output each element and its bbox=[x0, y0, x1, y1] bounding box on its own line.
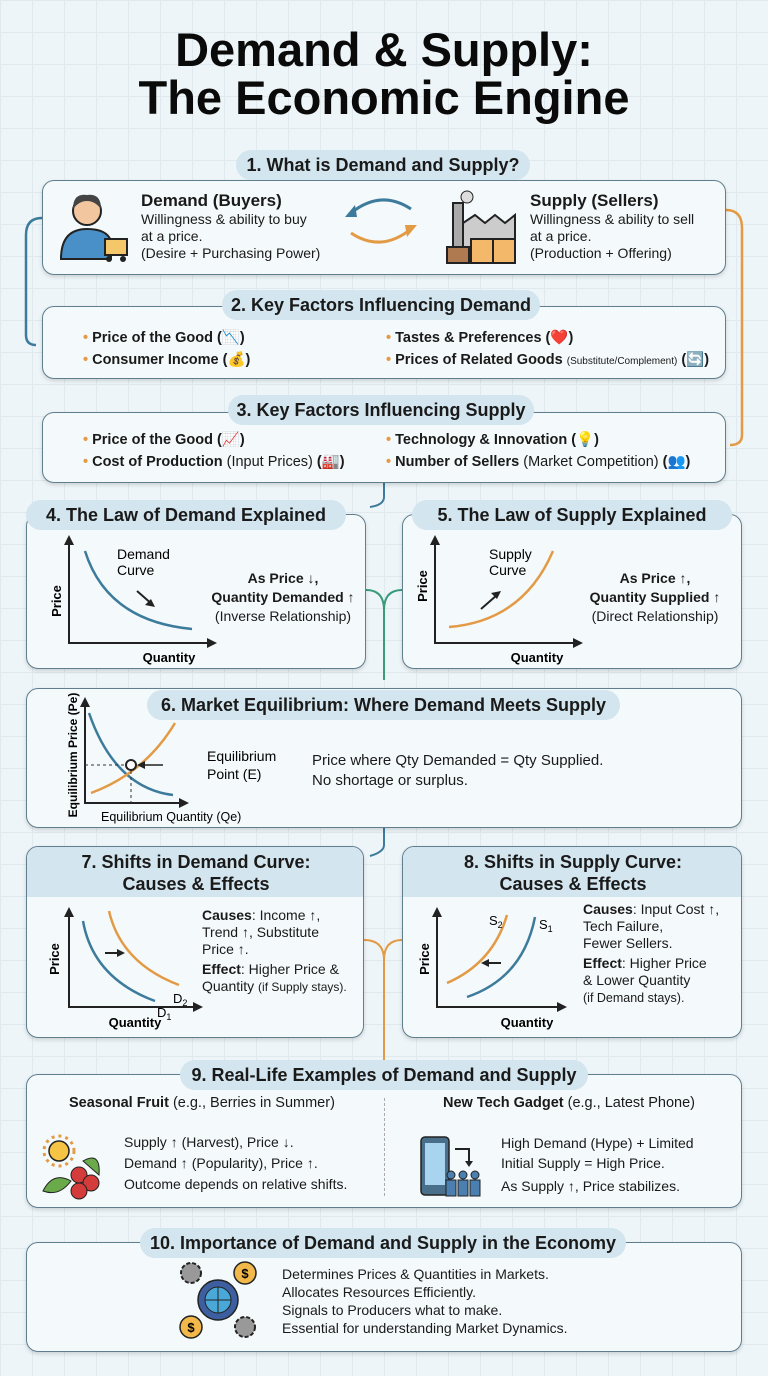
panel: demand factors: • Price of the Good (📉) bbox=[83, 330, 245, 346]
heading: 5 bbox=[412, 500, 732, 530]
text: Tech Failure, bbox=[583, 918, 663, 934]
icon: globe with gears and coins: $ bbox=[187, 1320, 195, 1335]
panel: market equilibrium bbox=[26, 688, 742, 828]
panel: demand factors: • Tastes & Preferences (❤️) bbox=[386, 330, 573, 346]
icon: phone and people bbox=[420, 1136, 480, 1196]
chart: demand shift: Quantity bbox=[109, 1015, 162, 1030]
text bbox=[590, 570, 720, 624]
panel: importance bbox=[26, 1242, 742, 1352]
arrows: exchange bbox=[345, 198, 417, 244]
text: Price where Qty Demanded = Qty Supplied. bbox=[312, 752, 603, 769]
text: Trend ↑, Substitute bbox=[202, 924, 319, 940]
text: fruit details bbox=[124, 1134, 347, 1192]
heading: 10 bbox=[140, 1228, 626, 1258]
text: Price ↑. bbox=[202, 941, 249, 957]
text: No shortage or surplus. bbox=[312, 772, 468, 789]
title bbox=[139, 23, 629, 124]
text: fruit details: Outcome depends on relative shifts. bbox=[124, 1176, 347, 1192]
text: fruit details: Supply ↑ (Harvest), Price ↓. bbox=[124, 1134, 294, 1150]
heading: 5: 5. The Law of Supply Explained bbox=[437, 505, 707, 525]
heading: 4: 4. The Law of Demand Explained bbox=[46, 505, 326, 525]
text: demand: (Desire + Purchasing Power) bbox=[141, 245, 320, 261]
heading: 1 bbox=[236, 150, 530, 180]
heading: 6 bbox=[147, 690, 620, 720]
text: importance list: Allocates Resources Efficiently. bbox=[282, 1284, 476, 1300]
text: Fewer Sellers. bbox=[583, 935, 672, 951]
text: tech gadget title: New Tech Gadget (e.g., Latest Phone) bbox=[443, 1095, 695, 1111]
chart: supply shift: S bbox=[489, 913, 498, 928]
chart: demand curve: Curve bbox=[117, 562, 155, 578]
chart: supply shift bbox=[417, 907, 567, 1030]
chart: supply shift: Price bbox=[417, 943, 432, 975]
text: importance list: Determines Prices & Quantities in Markets. bbox=[282, 1266, 549, 1282]
text: Effect: Higher Price bbox=[583, 955, 707, 971]
panel: shifts in supply bbox=[402, 846, 742, 1038]
text bbox=[202, 907, 347, 994]
chart: supply curve: Quantity bbox=[511, 650, 564, 665]
panel: shifts in demand bbox=[26, 846, 364, 1038]
text: (if Demand stays). bbox=[583, 991, 684, 1005]
chart: equilibrium bbox=[66, 693, 276, 824]
chart: supply shift: S bbox=[539, 917, 548, 932]
chart: demand curve bbox=[49, 535, 217, 665]
panel: demand factors: • Consumer Income (💰) bbox=[83, 352, 250, 368]
text: demand bbox=[141, 191, 320, 261]
chart: demand shift: Price bbox=[47, 943, 62, 975]
panel: demand factors bbox=[42, 306, 726, 379]
text: Quantity Supplied ↑ bbox=[590, 589, 720, 605]
text: supply: Supply (Sellers) bbox=[530, 191, 658, 210]
chart: supply shift: 1 bbox=[548, 924, 553, 934]
panel: supply factors: • Number of Sellers (Market Competition) (👥) bbox=[386, 454, 690, 470]
chart: demand shift: 1 bbox=[166, 1012, 171, 1022]
chart: demand curve: Demand bbox=[117, 546, 170, 562]
chart: supply curve bbox=[415, 535, 583, 665]
heading: 2: 2. Key Factors Influencing Demand bbox=[231, 295, 531, 315]
icon: globe with gears and coins bbox=[179, 1261, 257, 1339]
heading: 3: 3. Key Factors Influencing Supply bbox=[236, 400, 526, 420]
chart: equilibrium: Equilibrium Price (Pe) bbox=[66, 693, 80, 817]
chart: supply curve: Price bbox=[415, 570, 430, 602]
chart: demand shift bbox=[47, 907, 203, 1030]
chart: demand shift: D bbox=[157, 1005, 166, 1020]
title: Demand & Supply: bbox=[175, 23, 593, 76]
panel: supply factors: • Cost of Production (Input Prices) (🏭) bbox=[83, 454, 345, 470]
text: (Direct Relationship) bbox=[592, 608, 718, 624]
text: gadget details bbox=[501, 1135, 694, 1194]
text: demand: at a price. bbox=[141, 228, 202, 244]
text: importance list: Essential for understanding Market Dynamics. bbox=[282, 1320, 568, 1336]
chart: demand shift: D bbox=[173, 991, 182, 1006]
text: demand: Willingness & ability to buy bbox=[141, 211, 307, 227]
text: Quantity Demanded ↑ bbox=[211, 589, 355, 605]
heading: 8: Causes & Effects bbox=[499, 874, 647, 894]
chart: demand shift: 2 bbox=[182, 998, 187, 1008]
chart: equilibrium: Point (E) bbox=[207, 766, 261, 782]
text: Causes: Input Cost ↑, bbox=[583, 901, 719, 917]
panel: demand factors: • Prices of Related Goods (Substitute/Complement) (🔄) bbox=[386, 352, 709, 368]
chart: supply curve: Curve bbox=[489, 562, 527, 578]
heading: 2 bbox=[222, 290, 540, 320]
text: importance list bbox=[282, 1266, 568, 1336]
text: & Lower Quantity bbox=[583, 972, 690, 988]
chart: equilibrium: Equilibrium Quantity (Qe) bbox=[101, 810, 241, 824]
chart: equilibrium: Equilibrium bbox=[207, 748, 276, 764]
text: Quantity (if Supply stays). bbox=[202, 978, 347, 994]
heading: 1: 1. What is Demand and Supply? bbox=[246, 155, 520, 175]
text: Causes: Income ↑, bbox=[202, 907, 320, 923]
chart: supply shift: Quantity bbox=[501, 1015, 554, 1030]
text: supply: at a price. bbox=[530, 228, 591, 244]
heading: 10: 10. Importance of Demand and Supply in the Economy bbox=[150, 1233, 616, 1253]
panel: law of demand bbox=[26, 514, 366, 669]
panel: supply factors: • Technology & Innovation (💡) bbox=[386, 432, 599, 448]
text: gadget details: As Supply ↑, Price stabilizes. bbox=[501, 1178, 680, 1194]
text: As Price ↑, bbox=[620, 570, 690, 586]
panel: law of supply bbox=[402, 514, 742, 669]
text bbox=[211, 570, 355, 624]
title: The Economic Engine bbox=[139, 71, 629, 124]
text: gadget details: High Demand (Hype) + Limited bbox=[501, 1135, 694, 1151]
text bbox=[312, 752, 603, 789]
icon: buyer bbox=[60, 194, 128, 262]
icon: globe with gears and coins: $ bbox=[241, 1266, 249, 1281]
text: supply: Willingness & ability to sell bbox=[530, 211, 694, 227]
heading: 7: Causes & Effects bbox=[122, 874, 270, 894]
panel: supply factors: • Price of the Good (📈) bbox=[83, 432, 245, 448]
icon: sun and berries bbox=[42, 1134, 100, 1200]
panel: what is demand and supply bbox=[42, 180, 726, 275]
icon: factory bbox=[446, 190, 516, 264]
text: supply: (Production + Offering) bbox=[530, 245, 672, 261]
chart: supply curve: Supply bbox=[489, 546, 532, 562]
text: As Price ↓, bbox=[248, 570, 318, 586]
text: demand: Demand (Buyers) bbox=[141, 191, 282, 210]
text: (Inverse Relationship) bbox=[215, 608, 351, 624]
heading: 7 bbox=[27, 847, 365, 897]
text: fruit details: Demand ↑ (Popularity), Price ↑. bbox=[124, 1155, 318, 1171]
chart: demand curve: Price bbox=[49, 585, 64, 617]
heading: 8: 8. Shifts in Supply Curve: bbox=[464, 852, 682, 872]
text: importance list: Signals to Producers what to make. bbox=[282, 1302, 502, 1318]
text: Effect: Higher Price & bbox=[202, 961, 339, 977]
heading: 3 bbox=[228, 395, 534, 425]
chart: demand curve: Quantity bbox=[143, 650, 196, 665]
heading: 4 bbox=[26, 500, 346, 530]
text: gadget details: Initial Supply = High Price. bbox=[501, 1155, 665, 1171]
heading: 6: 6. Market Equilibrium: Where Demand Meets Supply bbox=[161, 695, 606, 715]
heading: 7: 7. Shifts in Demand Curve: bbox=[81, 852, 311, 872]
heading: 8 bbox=[403, 847, 743, 897]
chart: supply shift: 2 bbox=[498, 920, 503, 930]
panel: real-life examples bbox=[26, 1074, 742, 1208]
heading: 9: 9. Real-Life Examples of Demand and Supply bbox=[191, 1065, 577, 1085]
panel: supply factors bbox=[42, 412, 726, 483]
text: seasonal fruit title: Seasonal Fruit (e.g., Berries in Summer) bbox=[69, 1095, 335, 1111]
text: supply bbox=[530, 191, 694, 261]
heading: 9 bbox=[180, 1060, 588, 1090]
text bbox=[583, 901, 719, 1005]
